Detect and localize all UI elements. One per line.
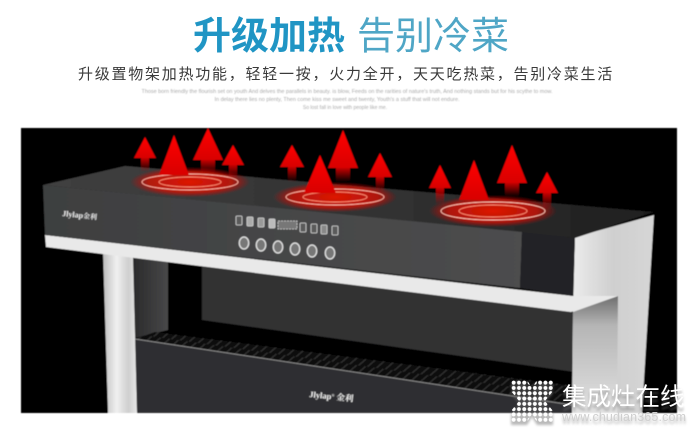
- drawer logo: 金利: [334, 392, 354, 404]
- rear display panel: [202, 266, 580, 372]
- heat arrows group 3: [429, 145, 558, 210]
- watermark shadow: [511, 383, 553, 425]
- title: [193, 16, 509, 58]
- right steel leg: [572, 215, 654, 413]
- watermark url: www.chudian365.com: [561, 410, 686, 424]
- rack slats: [135, 332, 575, 405]
- heat arrows group 2: [280, 130, 392, 193]
- hob top surface: [43, 166, 654, 238]
- control buttons row: [239, 237, 335, 259]
- watermark name: 集成灶在线: [562, 383, 684, 411]
- small English text block: [142, 89, 552, 111]
- watermark dot logo: [511, 380, 553, 422]
- white front strip: [45, 235, 618, 312]
- photo background: [21, 128, 677, 413]
- drawer top edge: [135, 339, 572, 405]
- drawer logo: ®: [331, 392, 335, 398]
- drawer logo: Jlylap: [309, 389, 332, 401]
- lower drawer panel: [135, 339, 572, 413]
- watermark name: 集成灶在线: [562, 387, 684, 415]
- heating zone 2: [273, 182, 397, 212]
- product photo panel: [21, 128, 677, 413]
- heat arrows group 1: [134, 128, 244, 179]
- watermark: [511, 380, 686, 427]
- title: 升级加热: [193, 16, 345, 58]
- small English text block: In delay there lies no plenty, Then come kiss me sweet and twenty, Youth's a stuff that will not endure.: [214, 97, 460, 103]
- small English text block: Those born friendly the flourish set on youth And delves the parallels in beauty. is blow, Feeds on the rarities of nature's truth, And nothing stands but for his scythe to mow.: [142, 89, 552, 95]
- front control face: [43, 185, 522, 288]
- rear side panel: [133, 250, 168, 338]
- control icons row: [236, 216, 338, 235]
- heating zone 1: [130, 167, 250, 197]
- dark right face section: [520, 232, 575, 296]
- heating zone 3: [429, 195, 557, 227]
- small English text block: So lost fall in love with people like me.: [303, 105, 387, 111]
- subtitle: 升级置物架加热功能，轻轻一按，火力全开，天天吃热菜，告别冷菜生活: [78, 65, 614, 83]
- title: 告别冷菜: [357, 16, 509, 58]
- left steel leg: [103, 252, 137, 413]
- brand logo on face: Jlylap金利: [62, 209, 97, 222]
- watermark url: www.chudian365.com: [561, 413, 686, 427]
